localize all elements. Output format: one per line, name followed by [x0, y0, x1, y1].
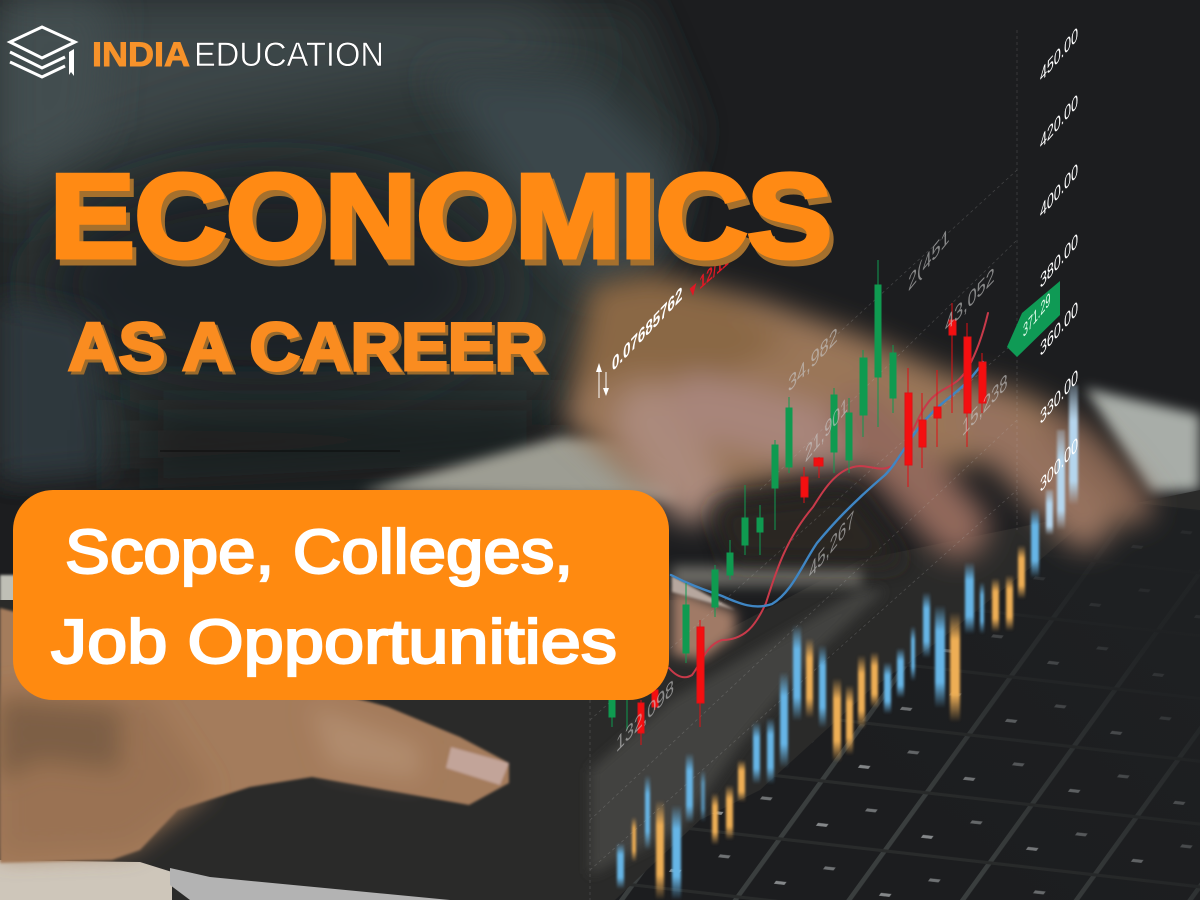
logo wordmark: EDUCATION [194, 36, 384, 74]
chart: faded data labels: 2(451 [908, 223, 950, 297]
chart: price ticker [596, 248, 729, 398]
title: Economics: ECONOMICS [54, 156, 836, 289]
chart: faded data labels: 132,098 [616, 674, 674, 758]
chart: faded data labels: 43,052 [945, 262, 995, 338]
chart: faded data labels: 21,901 [805, 392, 848, 468]
chart: price axis labels: 360.00 [1040, 297, 1078, 362]
chart: price axis labels [1040, 23, 1078, 498]
left hand and thumb [0, 608, 509, 863]
chart: price axis labels: 330.00 [1040, 365, 1078, 430]
chart: red and blue trend lines [669, 313, 988, 677]
chart: price axis labels: 380.00 [1040, 229, 1078, 294]
lower thumb behind the chart [672, 588, 736, 660]
icon: India Education stacked-book logo [10, 27, 75, 77]
subtitle: As a Career: AS A CAREER [68, 309, 545, 385]
chart: price axis labels: 420.00 [1040, 90, 1078, 155]
subtitle: As a Career: AS A CAREER [71, 312, 548, 388]
callout: orange topic banner [13, 490, 669, 700]
keyboard [600, 500, 1200, 900]
callout: orange topic banner: Job Opportunities [51, 608, 617, 677]
chart overlay grid lines [590, 30, 1017, 900]
upper hand [565, 272, 1150, 528]
title: Economics: ECONOMICS [50, 150, 832, 283]
chart: price ticker: 0.07685762 [612, 283, 682, 377]
chart: current price tag [1007, 281, 1060, 357]
chart: faded data labels [616, 223, 1008, 758]
logo wordmark [92, 36, 384, 74]
logo wordmark: INDIA [92, 36, 190, 74]
chart: red candlesticks [638, 303, 986, 745]
chart: price ticker: ▾ 12/11 [689, 248, 729, 303]
chart: price axis labels: 300.00 [1040, 433, 1078, 498]
chart: price axis labels: 400.00 [1040, 159, 1078, 224]
chart: faded data labels: 15,238 [962, 369, 1008, 442]
chart: current price tag: 371.29 [1023, 288, 1050, 342]
chart: green candlesticks [609, 260, 896, 730]
callout: orange topic banner: Scope, Colleges, [65, 518, 573, 587]
chart: price axis labels: 450.00 [1040, 23, 1078, 88]
chart: faded data labels: 45,267 [809, 506, 854, 585]
chart: blue and orange volume bars [617, 385, 1078, 900]
chart: faded data labels: 34,982 [788, 322, 838, 398]
